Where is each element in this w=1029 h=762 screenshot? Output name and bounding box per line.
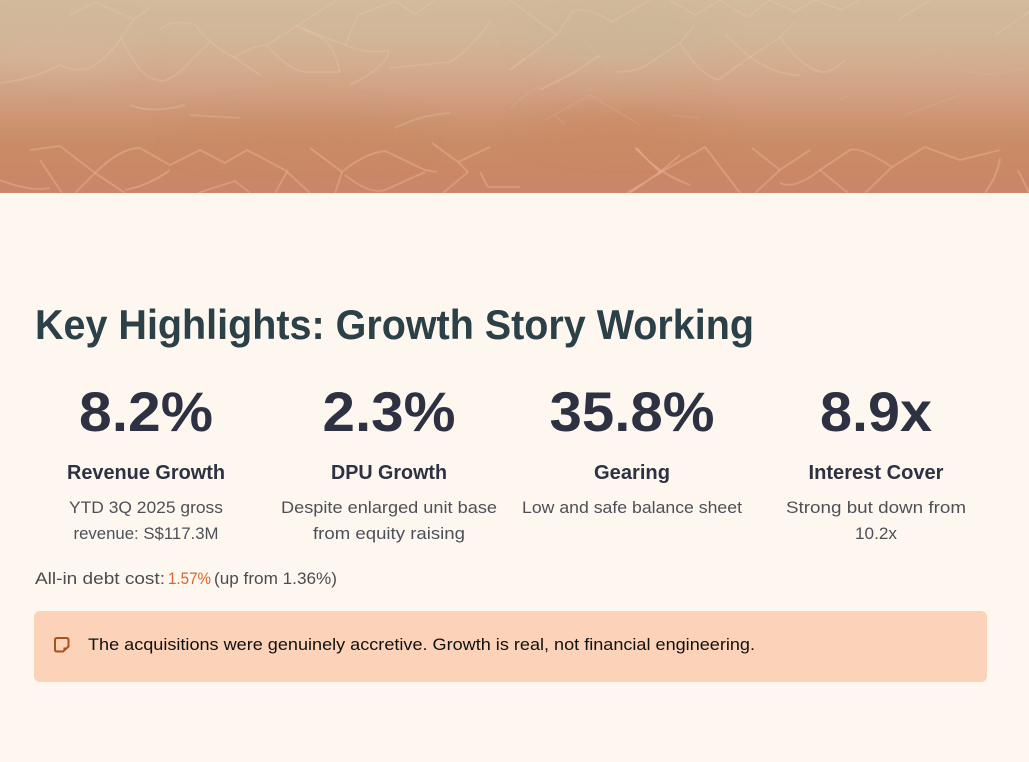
description	[281, 498, 497, 543]
description: Strong but down from	[786, 498, 966, 517]
description: from equity raising	[313, 524, 465, 543]
title: Key Highlights: Growth Story Working	[35, 301, 754, 348]
label: DPU Growth: DPU Growth	[331, 462, 447, 484]
label: Revenue Growth: Revenue Growth	[67, 462, 225, 484]
faint upper lines	[0, 0, 1029, 128]
icon: sticky note	[55, 638, 68, 652]
value: 2.3%: 2.3%	[322, 380, 456, 443]
callout	[34, 611, 987, 682]
description: Despite enlarged unit base	[281, 498, 497, 517]
value: 8.9x: 8.9x	[820, 380, 932, 443]
debt cost line: All-in debt cost:	[35, 569, 165, 588]
value: 35.8%: 35.8%	[550, 380, 714, 443]
metric: gearing	[522, 380, 742, 517]
brighter lower lines	[0, 143, 1029, 193]
label: Interest Cover: Interest Cover	[808, 462, 944, 484]
description	[69, 498, 223, 543]
label: Gearing: Gearing	[594, 462, 670, 484]
metric: DPU growth	[281, 380, 497, 543]
banner: textured terracotta image	[0, 0, 1029, 193]
value: 8.2%: 8.2%	[79, 380, 213, 443]
debt cost line: 1.57%	[168, 569, 211, 588]
metric: interest cover	[786, 380, 966, 543]
callout text: The acquisitions were genuinely accretive. Growth is real, not financial engineering.	[88, 635, 755, 654]
description: revenue: S$117.3M	[74, 524, 218, 543]
debt cost line	[35, 569, 337, 588]
description: 10.2x	[855, 524, 897, 543]
description	[786, 498, 966, 543]
description: YTD 3Q 2025 gross	[69, 498, 223, 517]
description: Low and safe balance sheet	[522, 498, 742, 517]
debt cost line: (up from 1.36%)	[214, 569, 337, 588]
metric: revenue growth	[67, 380, 225, 543]
